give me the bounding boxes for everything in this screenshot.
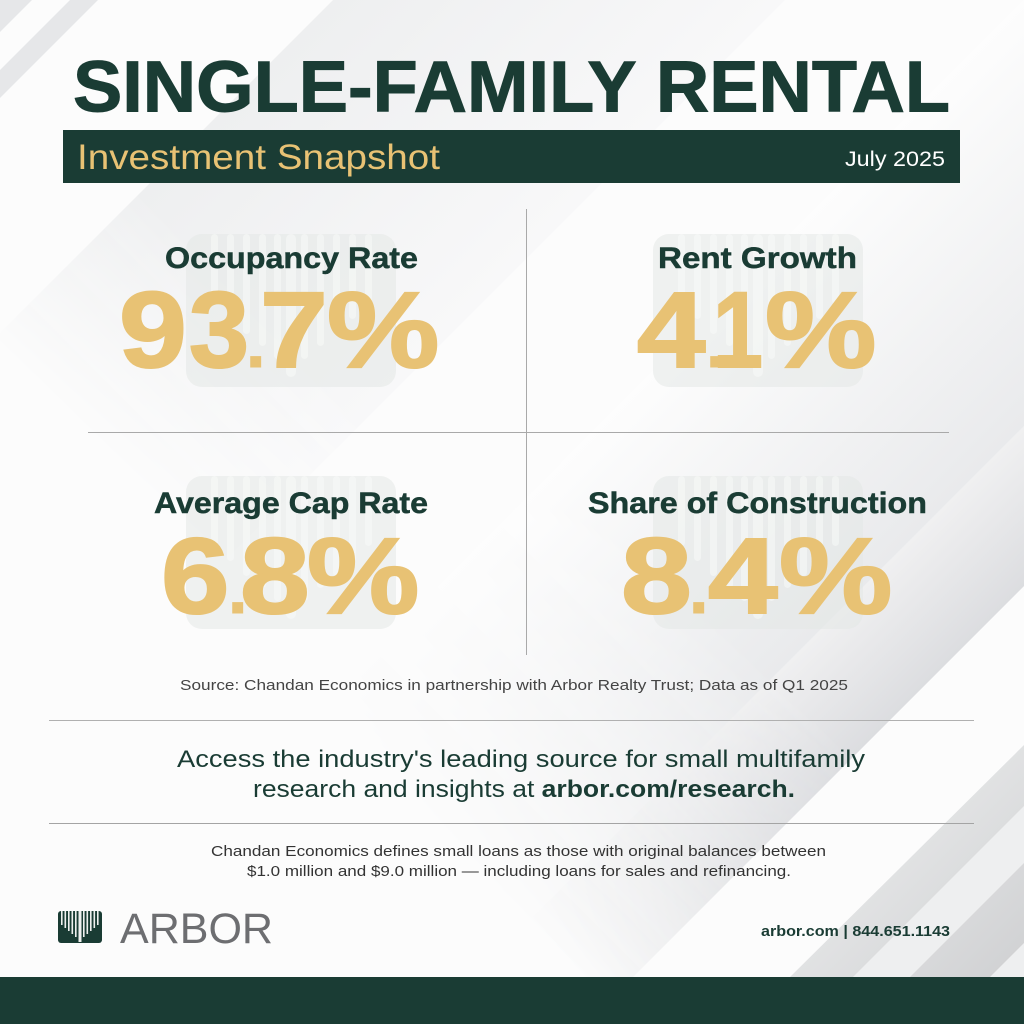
wordmark: ARBOR <box>120 905 273 953</box>
source note: Source: Chandan Economics in partnership with Arbor Realty Trust; Data as of Q1 2025 <box>180 678 848 694</box>
stat: average cap rate <box>0 487 1024 647</box>
label: Occupancy Rate <box>165 242 418 275</box>
banner date: July 2025 <box>845 148 945 171</box>
value <box>0 522 1024 647</box>
rule below call to action <box>49 822 974 824</box>
stat: share of construction <box>0 487 1024 647</box>
definition note: $1.0 million and $9.0 million — including loans for sales and refinancing. <box>247 864 791 880</box>
contact details: arbor.com | 844.651.1143 <box>761 923 950 940</box>
definition note <box>211 844 826 880</box>
value: . <box>246 304 265 382</box>
footer bar <box>0 977 1024 1024</box>
value <box>0 276 1024 401</box>
call to action: research and insights at arbor.com/research. <box>253 776 795 803</box>
label: Rent Growth <box>658 242 857 275</box>
call to action <box>177 746 865 803</box>
icon: arbor mark <box>58 911 102 943</box>
value <box>0 276 1024 401</box>
value: . <box>228 550 247 628</box>
quadrant dividers <box>88 209 949 655</box>
value: . <box>689 550 708 628</box>
stat: rent growth <box>0 242 1024 401</box>
title: SINGLE-FAMILY RENTAL <box>73 48 950 128</box>
banner subtitle: Investment Snapshot <box>77 138 440 177</box>
label: Average Cap Rate <box>154 487 428 520</box>
label: Share of Construction <box>588 487 927 520</box>
value <box>0 522 1024 647</box>
value: . <box>706 304 725 382</box>
watermark logos <box>186 234 863 629</box>
arbor logo <box>58 905 273 953</box>
stat: occupancy rate <box>0 242 1024 401</box>
banner <box>63 130 960 183</box>
call to action: Access the industry's leading source for small multifamily <box>177 746 865 773</box>
rule above call to action <box>49 720 974 722</box>
definition note: Chandan Economics defines small loans as those with original balances between <box>211 844 826 860</box>
